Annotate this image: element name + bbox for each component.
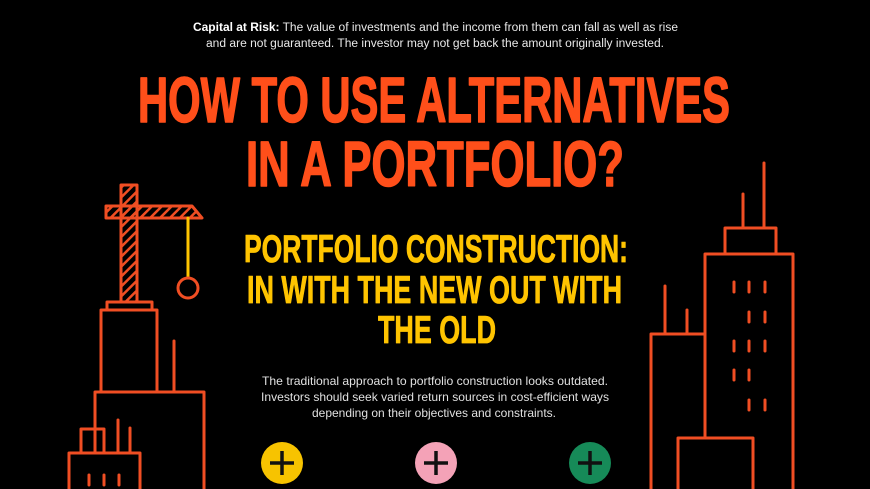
subtitle: IN WITH THE NEW OUT WITH xyxy=(247,269,622,312)
body text xyxy=(261,374,609,420)
crane xyxy=(106,185,202,302)
title xyxy=(138,64,730,200)
subtitle xyxy=(244,228,628,352)
windows xyxy=(734,282,765,410)
disclaimer text xyxy=(193,22,678,50)
body text: The traditional approach to portfolio construction looks outdated. xyxy=(262,374,608,388)
left building with crane xyxy=(69,185,204,489)
title: IN A PORTFOLIO? xyxy=(246,128,624,200)
body text: depending on their objectives and constraints. xyxy=(312,406,556,420)
subtitle: PORTFOLIO CONSTRUCTION: xyxy=(244,228,628,271)
icon: green plus xyxy=(569,442,611,484)
disclaimer text: and are not guaranteed. The investor may not get back the amount originally invested. xyxy=(206,38,664,50)
right skyscrapers xyxy=(651,163,793,489)
body text: Investors should seek varied return sources in cost-efficient ways xyxy=(261,390,609,404)
subtitle: THE OLD xyxy=(378,309,496,352)
icon: yellow plus xyxy=(261,442,303,484)
icon: pink plus xyxy=(415,442,457,484)
disclaimer text: Capital at Risk: The value of investments and the income from them can fall as well as rise xyxy=(193,22,678,34)
